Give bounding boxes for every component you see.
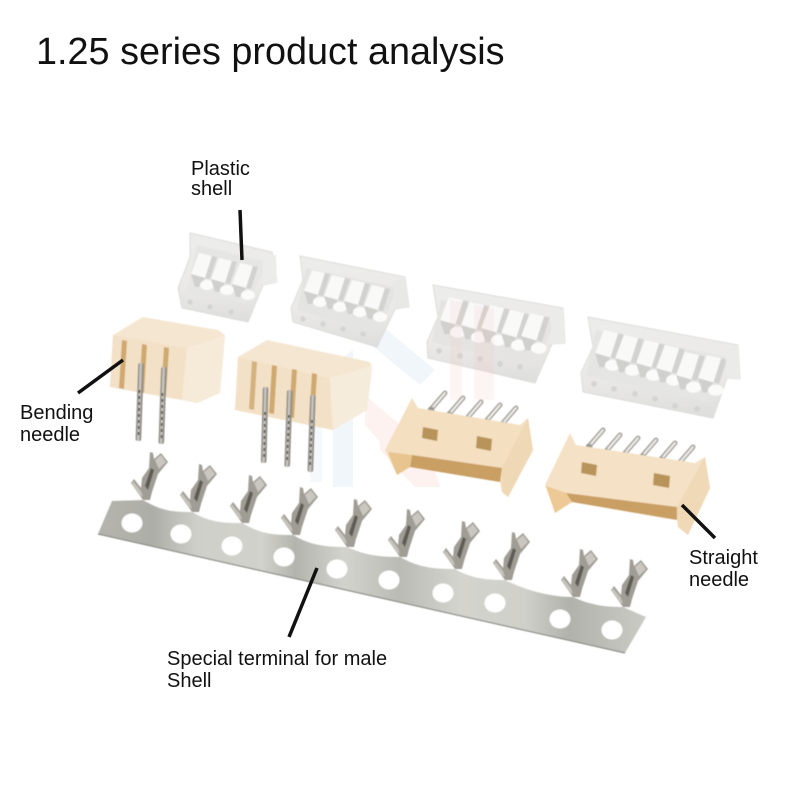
connector photo group xyxy=(98,233,740,653)
callout: plastic shell: shell xyxy=(191,178,232,200)
callout: straight needle: needle xyxy=(689,569,749,591)
callout: straight needle xyxy=(682,505,758,591)
plastic shell 5 pin xyxy=(427,285,565,400)
bending needle header 2 pin xyxy=(110,317,225,444)
callout: bending needle xyxy=(20,360,123,446)
plastic shell 3 pin xyxy=(178,233,277,322)
callout: plastic shell: Plastic xyxy=(191,158,250,180)
special terminal strip xyxy=(98,452,648,653)
bending needle header 3 pin xyxy=(235,340,372,472)
watermark logo xyxy=(310,320,440,487)
callout: bending needle: Bending xyxy=(20,402,93,424)
callout: straight needle: Straight xyxy=(689,547,758,569)
callout: special terminal: Special terminal for male xyxy=(167,648,387,670)
straight needle header 5 pin xyxy=(385,393,533,497)
straight needle header 6 pin xyxy=(545,430,710,535)
watermark tint on shell xyxy=(450,300,462,400)
plastic shell 6 pin xyxy=(581,317,740,418)
plastic shell 4 pin xyxy=(291,256,409,347)
callout: plastic shell xyxy=(191,158,250,260)
title: 1.25 series product analysis xyxy=(36,31,505,73)
callout: bending needle: needle xyxy=(20,424,80,446)
callout: special terminal xyxy=(167,568,387,692)
callout: special terminal: Shell xyxy=(167,670,211,692)
